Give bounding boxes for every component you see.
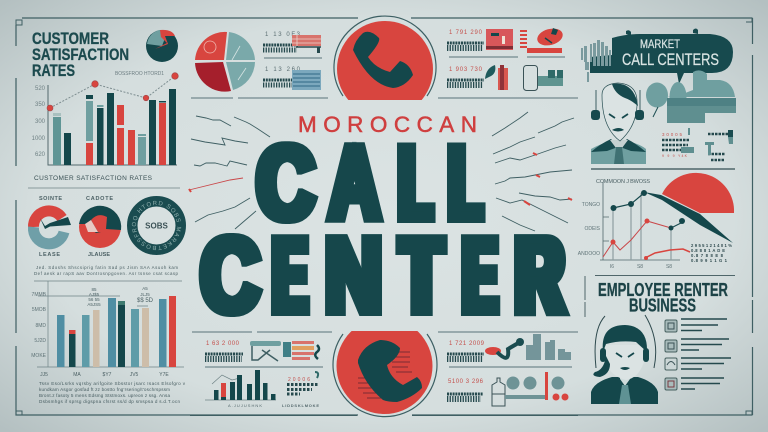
people row bbox=[205, 354, 243, 359]
people row bbox=[447, 354, 484, 359]
x labels: $Y7 bbox=[103, 372, 112, 378]
donut chart 2 bbox=[79, 206, 121, 248]
panel: donut charts bbox=[28, 196, 186, 276]
legend label: BOSSFROO HTORD1 bbox=[115, 71, 164, 77]
panel: right line chart: I6 bbox=[610, 264, 614, 270]
center: R bbox=[516, 215, 563, 334]
paragraph: Dsbsmhgs if sprsg digspna cfsrst ss/d dp smspsa d s.d.T.ocn bbox=[39, 399, 180, 404]
arc bbox=[334, 16, 436, 96]
red circle bbox=[336, 331, 432, 414]
dark line with wedge bbox=[610, 190, 733, 243]
call: L bbox=[399, 125, 431, 241]
bars bbox=[57, 296, 176, 367]
people row bbox=[447, 394, 483, 399]
panel: employee renter business bbox=[591, 279, 731, 404]
call bbox=[257, 124, 481, 241]
icon: table bbox=[292, 70, 321, 90]
speech bubble bbox=[590, 34, 733, 84]
red circle bbox=[337, 21, 433, 100]
bars beside bubble bbox=[581, 40, 611, 82]
stat label: 5100 3 296 bbox=[448, 379, 484, 385]
center: T bbox=[401, 216, 442, 334]
icon: outlined phone bbox=[524, 66, 538, 90]
section rule bbox=[585, 276, 735, 317]
bubble tails bbox=[653, 107, 658, 117]
stat label: 1 791 290 bbox=[449, 30, 483, 36]
drop lines bbox=[613, 193, 671, 260]
y axis labels: 300 bbox=[35, 119, 46, 125]
stat label: 1 13 0F3 bbox=[265, 32, 301, 38]
y labels: 7MMB bbox=[32, 292, 47, 298]
bar chart bbox=[48, 85, 177, 165]
donut labels: SOINTE bbox=[39, 196, 62, 202]
panel: top mid-left stats bbox=[263, 32, 321, 90]
call: A bbox=[329, 125, 380, 241]
x labels: JJ5 bbox=[40, 372, 48, 378]
y labels bbox=[31, 292, 47, 359]
ring badge: SOBS bbox=[145, 222, 168, 230]
icon: red card bbox=[486, 29, 513, 50]
donut labels: LEASE bbox=[39, 252, 60, 258]
y axis labels: 520 bbox=[35, 86, 46, 92]
bar value labels: A5JS5 bbox=[87, 302, 101, 307]
bottom phone badge bbox=[332, 331, 438, 418]
icon: circles bbox=[505, 376, 564, 399]
title bbox=[201, 112, 563, 335]
description bbox=[34, 265, 179, 276]
decorative trend squiggles left bbox=[189, 116, 270, 229]
chart title: COMMOON J BWOSS bbox=[596, 179, 650, 185]
donut labels: JLAUSE bbox=[88, 252, 110, 258]
call: L bbox=[449, 125, 481, 241]
axis labels: ANDOOO bbox=[578, 251, 600, 257]
axis labels: ODEIS bbox=[584, 226, 601, 232]
y axis labels bbox=[32, 86, 46, 158]
call: C bbox=[257, 124, 314, 241]
bar value labels: 56 55 bbox=[88, 297, 100, 302]
y labels: 8MD bbox=[35, 323, 46, 329]
mini chart captions: LIDDSKLMOKE bbox=[282, 403, 319, 408]
dot matrix: 2 0 0 0 6 bbox=[288, 377, 310, 383]
bar value labels: JLJ5 bbox=[140, 292, 150, 297]
x labels: MA bbox=[73, 372, 81, 378]
icon: dot matrix bbox=[662, 128, 733, 160]
top phone badge bbox=[333, 16, 437, 100]
center bbox=[201, 215, 563, 335]
paragraph bbox=[39, 381, 186, 404]
y axis labels: 1000 bbox=[32, 136, 46, 142]
panel: right line chart: S8 bbox=[666, 264, 672, 270]
heading: BUSINESS bbox=[629, 294, 696, 316]
axes bbox=[600, 182, 680, 260]
stat label: 1 13 260 bbox=[265, 67, 301, 73]
heading: customer satisfaction rates: SATISFACTION bbox=[32, 46, 129, 64]
chart legend: 0.8 9 9 1 1 G 1 bbox=[691, 258, 728, 263]
panel: top left pie bbox=[195, 32, 255, 92]
icon: bench bbox=[292, 35, 321, 53]
description: Jed. Sdoshs Shscsiprig fatin Sad ps Jism SAA Asuoh kam bbox=[36, 265, 178, 270]
bottom dividers bbox=[192, 332, 578, 367]
chart legend: 0.8 8 8 1 A D E bbox=[691, 248, 725, 253]
icon: small pie bbox=[146, 30, 178, 62]
panel: right line chart bbox=[578, 173, 734, 270]
bar value labels: A5 bbox=[142, 286, 148, 291]
y labels: MOKE bbox=[31, 353, 47, 359]
moroccan: MOROCCAN bbox=[298, 112, 477, 137]
stat label: 1 721 2009 bbox=[449, 341, 485, 347]
bar value labels bbox=[87, 286, 154, 307]
icon: teal plants bbox=[538, 70, 563, 86]
bubble title: CALL CENTERS bbox=[622, 51, 719, 69]
icon: phone handset bbox=[358, 340, 422, 402]
paragraph: Bront.z fasoty 5 mens Edsmg Ststmoxs. upreon z ssg. Ansa bbox=[39, 393, 170, 398]
bubble title bbox=[622, 37, 719, 69]
icon list bbox=[665, 319, 731, 390]
panel: customer satisfaction rates bbox=[32, 30, 178, 182]
decorative trend squiggles right bbox=[492, 112, 574, 231]
list item 4 bbox=[665, 378, 724, 390]
heading: customer satisfaction rates bbox=[32, 30, 129, 80]
description: Def aesk ar rapS aav Dontrosnpgoven. Asr tsnse csat scasp bbox=[34, 271, 179, 276]
bubble title: MARKET bbox=[640, 37, 681, 51]
x labels: Y7E bbox=[159, 372, 169, 378]
list item 2 bbox=[665, 339, 729, 352]
panel: right line chart: S8 bbox=[637, 264, 643, 270]
y axis labels: 620 bbox=[35, 152, 46, 158]
people row bbox=[263, 80, 298, 85]
icon: leaf bbox=[485, 65, 495, 79]
icon: phone handset bbox=[353, 32, 413, 88]
heading: customer satisfaction rates: CUSTOMER bbox=[32, 30, 109, 48]
stat label: 1 63 2 000 bbox=[206, 341, 240, 347]
bubble bumps bbox=[626, 28, 698, 36]
icon: machine bbox=[250, 341, 281, 361]
icon: red dish bbox=[527, 26, 565, 53]
icon: red accents bbox=[545, 372, 568, 400]
icon: dot matrix: 3 0 0 0 5 bbox=[662, 132, 682, 137]
y axis labels: 350 bbox=[35, 102, 46, 108]
center: E bbox=[463, 216, 497, 335]
paragraph: kundkam Asgor gosfad ft zz bostto fng'rsering/t'oschrspssm bbox=[39, 387, 170, 392]
panel: grouped bar chart bbox=[31, 281, 186, 404]
chart axes bbox=[37, 281, 184, 367]
people row bbox=[447, 43, 484, 48]
icon: red bar bbox=[498, 65, 508, 90]
heading: customer satisfaction rates: RATES bbox=[32, 62, 75, 80]
icon: agent with headset bbox=[591, 83, 646, 164]
text lines bbox=[358, 352, 412, 398]
x labels: JV5 bbox=[130, 372, 139, 378]
list item 1 bbox=[665, 319, 727, 332]
icon: bottle bbox=[492, 378, 505, 406]
y labels: 5MOB bbox=[32, 307, 47, 313]
axis labels bbox=[578, 202, 601, 257]
donut chart 1 bbox=[33, 211, 71, 244]
people row bbox=[447, 80, 484, 85]
dark segment bbox=[668, 218, 685, 230]
people row bbox=[263, 45, 298, 50]
icon: teal speech bubbles and building bbox=[646, 70, 736, 123]
mini chart captions: A.JUJUSHNK bbox=[228, 403, 262, 408]
bar value labels: 85 bbox=[91, 287, 97, 292]
list item 3 bbox=[665, 358, 731, 370]
icon: stripes bbox=[520, 31, 527, 47]
arc bbox=[333, 334, 437, 417]
mini chart captions bbox=[228, 403, 319, 408]
x labels bbox=[40, 372, 169, 378]
icon: skyline bbox=[526, 334, 571, 360]
panel: top mid-right stats bbox=[447, 26, 565, 91]
panel: bottom right stats bbox=[447, 334, 571, 406]
center: C bbox=[201, 217, 259, 335]
trend line bbox=[47, 73, 178, 111]
caption: CUSTOMER SATISFACTION RATES bbox=[34, 175, 153, 182]
panel: bottom left stats bbox=[205, 341, 319, 408]
bar value labels: $$ 5D bbox=[137, 298, 154, 304]
y labels: 5J2D bbox=[34, 338, 46, 344]
center: E bbox=[273, 216, 307, 335]
mini bar chart bbox=[205, 370, 276, 400]
red half disk bbox=[662, 173, 734, 213]
chart legend: 0.8 7 8 8 E 8 bbox=[691, 253, 724, 258]
stat label: 1 903 730 bbox=[449, 67, 483, 73]
chart legend bbox=[691, 243, 732, 263]
ring badge bbox=[127, 196, 186, 255]
heading bbox=[598, 279, 728, 316]
icon: stacked stripes bbox=[283, 341, 319, 360]
bar value labels: AJ$5 bbox=[89, 292, 100, 297]
donut labels: CADOTE bbox=[86, 196, 113, 202]
icon: female agent bbox=[591, 315, 658, 404]
panel: market call centers bbox=[581, 28, 736, 164]
icon: faucet bbox=[485, 338, 524, 358]
section rule bbox=[591, 168, 735, 170]
center: N bbox=[325, 215, 382, 334]
icon: dot matrix: 9 9 9 Y4K bbox=[662, 154, 688, 158]
donut labels bbox=[39, 196, 113, 258]
chart legend: 2 9 5 5 1 2 1 4 0 1 % bbox=[691, 243, 732, 248]
red lines bbox=[603, 218, 690, 260]
axis labels: TONGO bbox=[582, 202, 600, 208]
top dividers bbox=[191, 57, 578, 98]
paragraph: Tssv Eso/Lsrks vqrsby arifgoite Sbsstor jsarc Isacs Elsofgro v bbox=[39, 381, 186, 386]
